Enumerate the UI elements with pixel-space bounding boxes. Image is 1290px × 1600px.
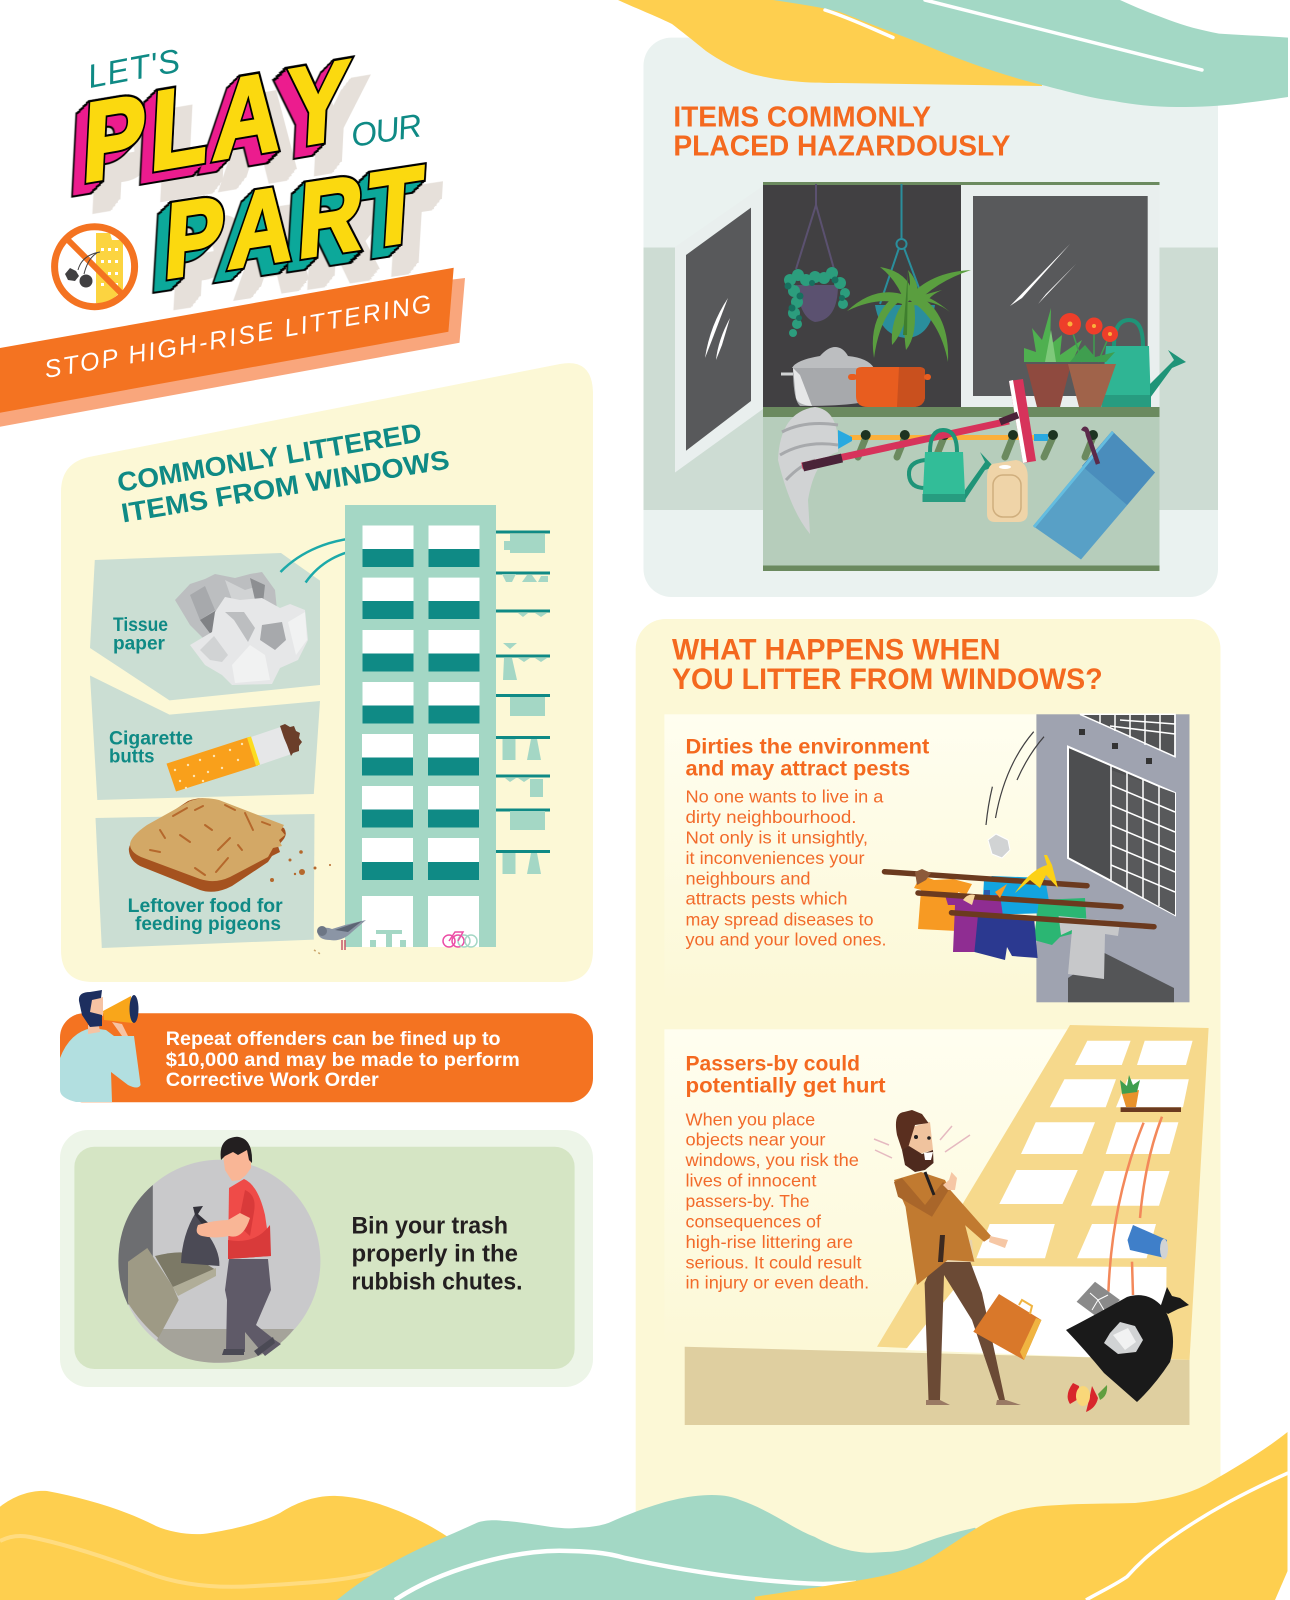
icon: man with megaphone — [60, 990, 141, 1102]
title: PLAY PART: PLAY — [80, 35, 358, 206]
item: tissue paper: Tissue — [113, 615, 168, 636]
body text: passers-by: serious. It could result — [686, 1252, 862, 1272]
item: leftover food: Leftover food for — [128, 896, 283, 917]
title word: OUR: OUR — [348, 106, 424, 154]
body text: passers-by: consequences of — [686, 1211, 821, 1231]
body text: dirties: neighbours and — [686, 868, 810, 888]
heading: commonly littered items from windows: ITEMS FROM WINDOWS — [119, 445, 452, 528]
heading: what happens when you litter from windows: WHAT HAPPENS WHEN — [672, 634, 1000, 666]
callout: fine warning — [60, 990, 593, 1102]
illustration: falling objects scene — [685, 1025, 1209, 1425]
body text: dirties: dirty neighbourhood. — [686, 807, 856, 827]
body text: passers-by — [684, 1109, 869, 1293]
effect card: passers-by could get hurt: Passers-by could — [686, 1053, 860, 1076]
effect card: passers-by could get hurt: potentially get hurt — [686, 1075, 886, 1098]
title: PLAY PART: PLAY — [80, 35, 358, 206]
icon: watering can on sill — [1101, 320, 1186, 407]
icon: cracked tablet — [1077, 1282, 1120, 1318]
body text: passers-by: windows, you risk the — [684, 1150, 859, 1170]
effect card: dirties the environment: and may attract pests — [686, 758, 910, 780]
title: PLAY PART: PLAY — [80, 35, 358, 206]
icon: cutting board — [987, 460, 1028, 522]
title: PLAY PART — [70, 35, 448, 319]
plant: red flowers in pot — [1059, 313, 1118, 407]
body text: dirties: may spread diseases to — [686, 909, 874, 929]
heading: items commonly placed hazardously: ITEMS COMMONLY — [673, 102, 931, 134]
body text: dirties: it inconveniences your — [686, 848, 865, 868]
laundry on poles — [884, 855, 1154, 979]
panel: bin your trash: Bin your trash — [352, 1212, 508, 1240]
body text: passers-by: When you place — [686, 1109, 815, 1129]
wave: top right — [618, 0, 1288, 107]
callout: fine warning: Repeat offenders can be fined up to — [166, 1029, 501, 1050]
heading: items commonly placed hazardously: PLACED HAZARDOUSLY — [673, 130, 1010, 162]
heading: commonly littered items from windows — [115, 417, 452, 528]
effect card: passers-by could get hurt — [664, 1025, 1209, 1425]
wave: bottom left yellow — [0, 1491, 448, 1600]
plant: aloe in pot — [1024, 308, 1082, 407]
body text: passers-by: passers-by. The — [686, 1191, 810, 1211]
effect card: dirties the environment: Dirties the environment — [686, 736, 929, 758]
title: PLAY PART: PART — [162, 143, 431, 301]
item: tissue paper: paper — [113, 634, 166, 654]
title: PLAY PART: PLAY — [97, 53, 375, 224]
illustration: apartment block — [314, 505, 550, 955]
plant: hanging ivy — [784, 184, 850, 337]
heading: what happens when you litter from windows: YOU LITTER FROM WINDOWS? — [672, 663, 1103, 696]
icon: burst trash bag — [1066, 1287, 1189, 1402]
icon: watering can on ledge — [909, 430, 994, 502]
figure: startled man — [874, 1110, 1041, 1405]
title: PLAY PART: PART — [162, 143, 431, 301]
panel: bin your trash: properly in the — [352, 1240, 518, 1268]
clothes racks on building — [496, 530, 550, 874]
body text: dirties: No one wants to live in a — [686, 787, 884, 807]
heading: what happens when you litter from windows — [672, 634, 1103, 696]
item: cigarette butts — [90, 676, 320, 800]
icon: blue basin — [1033, 429, 1155, 560]
title: PLAY PART: PART — [162, 143, 431, 301]
body text: dirties — [686, 787, 886, 950]
callout: fine warning: Corrective Work Order — [166, 1070, 379, 1091]
panel: bin your trash — [60, 1130, 593, 1387]
panel: bin your trash: rubbish chutes. — [352, 1268, 522, 1296]
illustration: pigeon — [314, 920, 366, 955]
body text: dirties: attracts pests which — [686, 889, 848, 909]
icon: no littering sign — [55, 227, 135, 307]
icon: crushed can — [1128, 1225, 1168, 1259]
effect card: dirties the environment — [664, 714, 1190, 1002]
title word: LET'S: LET'S — [85, 42, 183, 95]
title: PLAY PART: PLAY — [80, 35, 358, 206]
item: cigarette butts: butts — [109, 746, 154, 768]
illustration: person using rubbish chute — [118, 1137, 320, 1363]
body text: passers-by: lives of innocent — [686, 1171, 817, 1191]
heading: items commonly placed hazardously — [673, 102, 1010, 162]
body text: passers-by: high-rise littering are — [686, 1232, 853, 1252]
body text: passers-by: objects near your — [686, 1130, 826, 1150]
illustration: building with laundry — [884, 714, 1190, 1002]
item: leftover food — [96, 798, 331, 948]
item: leftover food: feeding pigeons — [135, 914, 281, 935]
panel: items commonly placed hazardously — [644, 38, 1218, 597]
body text: dirties: you and your loved ones. — [686, 930, 886, 950]
wave: bottom teal — [337, 1495, 1040, 1600]
body text: dirties: Not only is it unsightly, — [686, 827, 868, 847]
plant: hanging spider plant — [847, 184, 971, 362]
body text: passers-by: in injury or even death. — [686, 1273, 869, 1293]
title: PLAY PART: PART — [162, 143, 431, 301]
icon: mop pole, pegs and squeegee — [778, 379, 1098, 534]
banner: stop high-rise littering — [0, 268, 465, 427]
item: cigarette butts: Cigarette — [109, 728, 193, 750]
icon: silver cooking pot — [781, 347, 874, 406]
callout: fine warning: $10,000 and may be made to perform — [166, 1050, 520, 1071]
item: tissue paper — [90, 537, 369, 700]
banner: stop high-rise littering: STOP HIGH-RISE LITTERING — [42, 290, 433, 384]
icon: apple core — [1068, 1383, 1107, 1412]
illustration: window with hazardous items — [675, 182, 1186, 571]
heading: commonly littered items from windows: COMMONLY LITTERED — [115, 417, 424, 498]
panel: what happens when you litter — [636, 619, 1220, 1600]
title: PLAY PART: PART — [179, 161, 448, 319]
icon: orange casserole — [848, 360, 931, 407]
wave: bottom right yellow — [755, 1432, 1288, 1600]
